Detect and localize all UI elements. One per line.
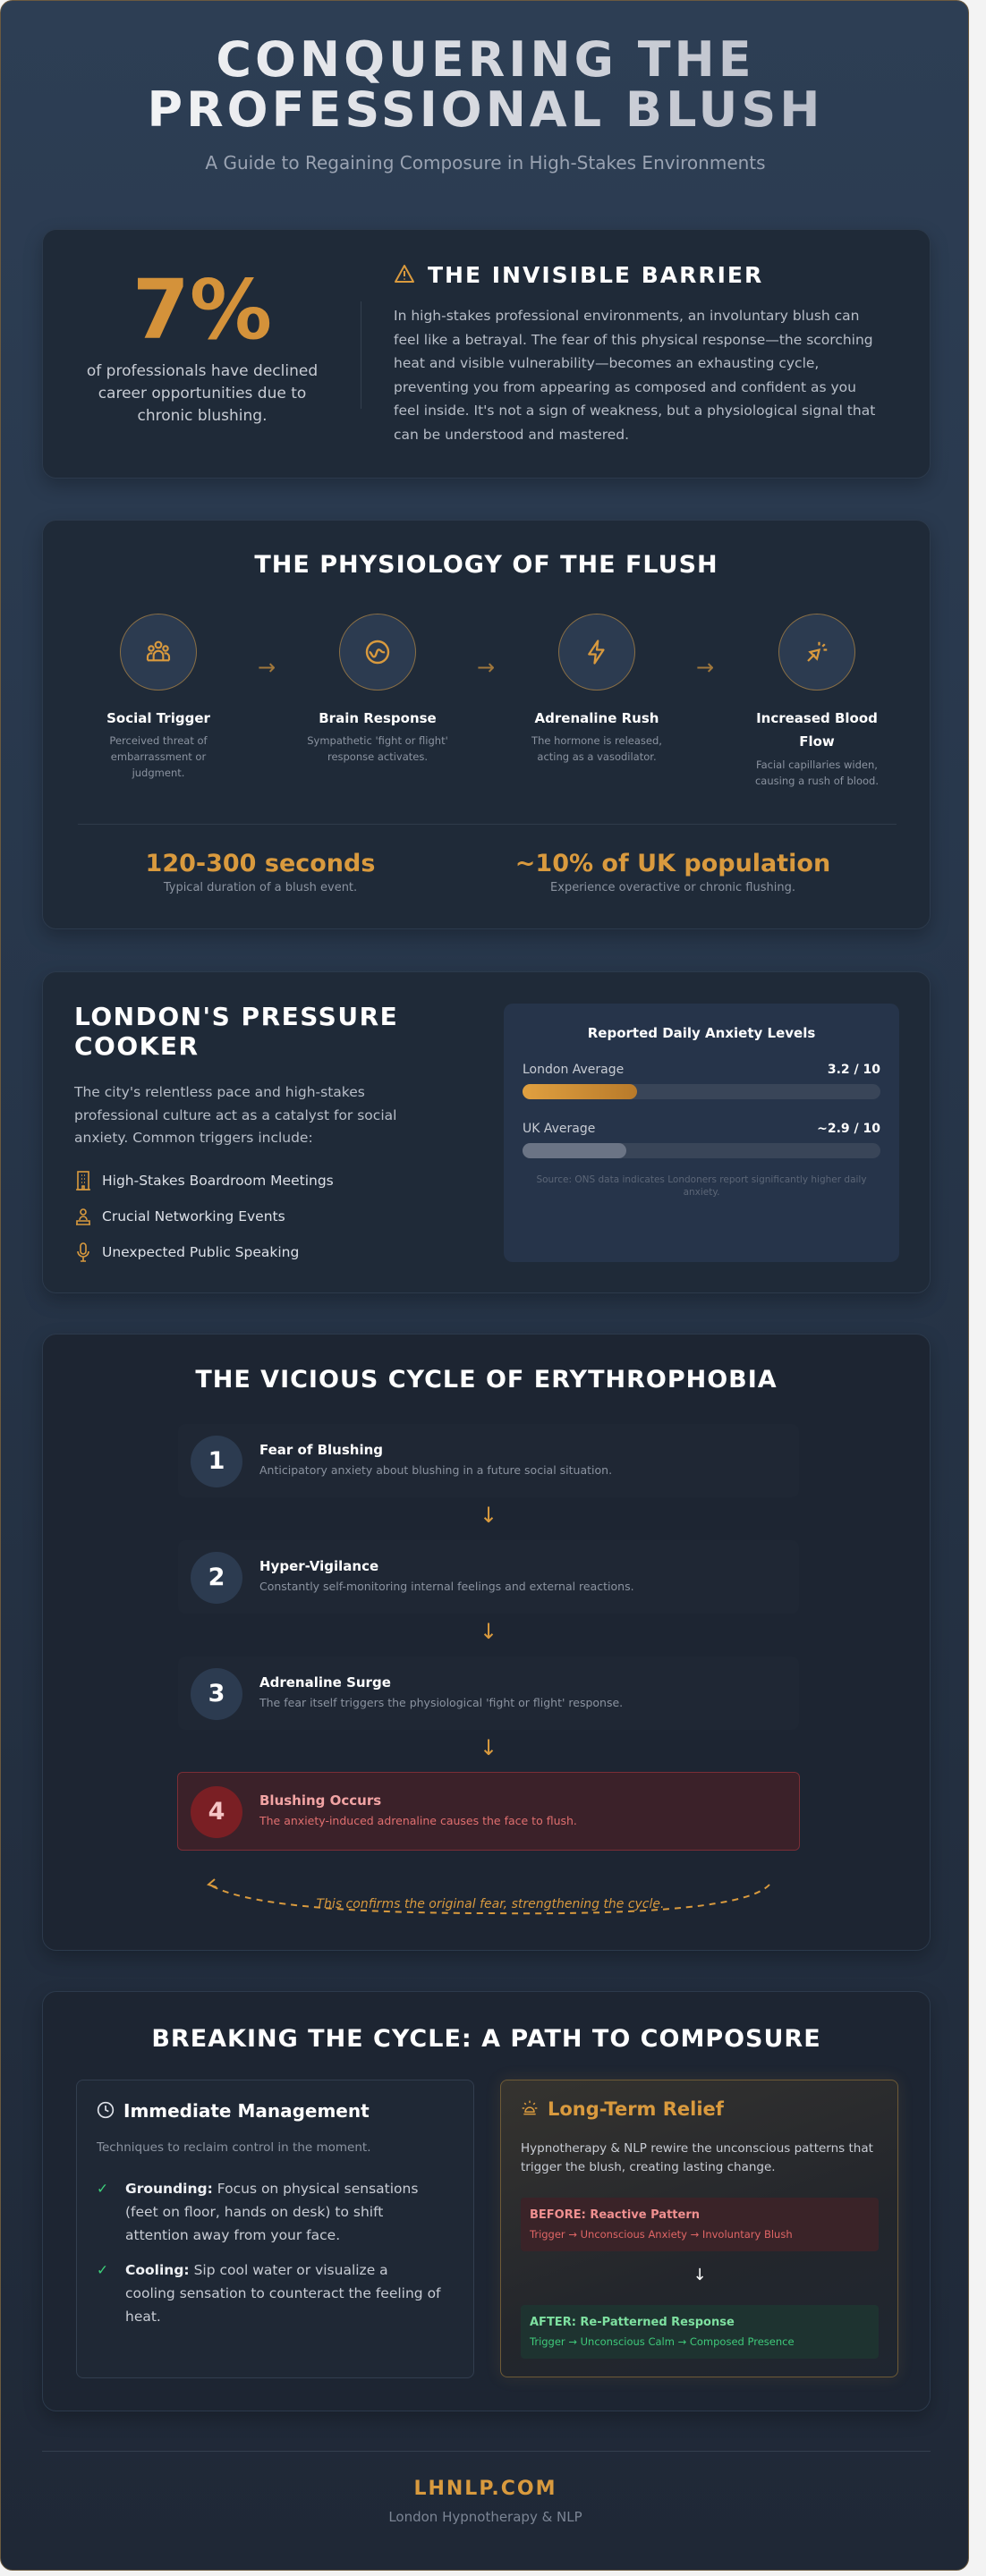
arrow: cycle return — [207, 1878, 770, 1914]
step 4: blushing occurs — [177, 1772, 800, 1851]
before pattern — [521, 2198, 879, 2251]
chart: anxiety levels: Reported Daily Anxiety Levels — [588, 1025, 815, 1041]
arrow: ↓ — [480, 1619, 497, 1644]
step 3: The fear itself triggers the physiological 'fight or flight' response. — [259, 1696, 623, 1709]
arrow: → — [477, 655, 495, 680]
box: long-term relief: Hypnotherapy & NLP rewire the unconscious patterns that trigger the blush, creating lasting change. — [521, 2141, 873, 2174]
step: social trigger — [106, 614, 210, 779]
chart: anxiety levels — [504, 1004, 899, 1262]
after pattern: Trigger → Unconscious Calm → Composed Presence — [530, 2335, 795, 2348]
panel: invisible barrier — [42, 229, 931, 479]
step: brain response: Brain Response — [319, 710, 437, 726]
step: social trigger: Social Trigger — [106, 710, 210, 726]
text: london intro: The city's relentless pace and high-stakes professional culture act as a catalyst for social anxiety. Common triggers include: — [74, 1084, 396, 1146]
box: long-term relief — [500, 2080, 898, 2377]
step 1: Anticipatory anxiety about blushing in a future social situation. — [259, 1463, 612, 1477]
step 2 — [178, 1540, 799, 1614]
arrow: ↓ — [693, 2266, 707, 2284]
heading: LONDON'S PRESSURE COOKER — [74, 1002, 398, 1061]
panel: breaking the cycle — [42, 1991, 931, 2411]
box: immediate management — [76, 2080, 474, 2378]
arrow: cycle return: This confirms the original fear, strengthening the cycle. — [317, 1897, 664, 1911]
step 4: blushing occurs: 4 — [208, 1798, 225, 1826]
title: CONQUERING THE — [216, 31, 755, 88]
box: immediate management: ✓ — [97, 2181, 108, 2197]
list: triggers: High-Stakes Boardroom Meetings — [102, 1173, 334, 1189]
box: immediate management: Immediate Management — [123, 2100, 370, 2122]
step 3: Adrenaline Surge — [259, 1674, 391, 1690]
list: triggers: Crucial Networking Events — [102, 1208, 285, 1224]
step: brain response: Sympathetic 'fight or flight' response activates. — [307, 734, 448, 763]
stat: population: Experience overactive or chronic flushing. — [550, 881, 795, 894]
list: triggers: Unexpected Public Speaking — [102, 1244, 299, 1260]
step: increased blood flow — [755, 614, 879, 787]
step: adrenaline rush: Adrenaline Rush — [535, 710, 659, 726]
step: increased blood flow: Facial capillaries widen, causing a rush of blood. — [755, 758, 879, 787]
icon: warning — [395, 265, 414, 283]
chart: anxiety levels: UK Average — [523, 1122, 595, 1136]
panel: physiology — [42, 520, 931, 929]
heading: BREAKING THE CYCLE: A PATH TO COMPOSURE — [151, 2025, 821, 2053]
box: immediate management: Cooling: Sip cool water or visualize a cooling sensation to counteract the feeling of heat. — [125, 2262, 441, 2325]
before pattern: Trigger → Unconscious Anxiety → Involuntary Blush — [530, 2228, 793, 2241]
stat: duration: 120-300 seconds — [146, 850, 375, 877]
arrow: → — [258, 655, 276, 680]
chart: anxiety levels: ~2.9 / 10 — [817, 1122, 880, 1136]
step 1 — [178, 1424, 799, 1497]
title: PROFESSIONAL BLUSH — [148, 81, 823, 138]
panel: vicious cycle — [42, 1334, 931, 1951]
step 3 — [178, 1657, 799, 1730]
heading: the invisible barrier: THE INVISIBLE BARRIER — [428, 262, 763, 288]
step: social trigger: Perceived threat of embarrassment or judgment. — [109, 734, 208, 779]
arrow: → — [696, 655, 714, 680]
heading: THE VICIOUS CYCLE OF ERYTHROPHOBIA — [195, 1366, 778, 1394]
footer — [388, 2478, 582, 2525]
box: immediate management: ✓ — [97, 2262, 108, 2278]
step: brain response — [307, 614, 448, 763]
text: barrier body: In high-stakes professional environments, an involuntary blush can feel like a betrayal. The fear of this physical response—the scorching heat and visible vulnerability—becomes an exhausting cycle, preventing you from appearing as composed and confident as you feel inside. It's not a sign of weakness, but a physiological signal that can be understood and mastered. — [394, 308, 875, 442]
chart: anxiety levels: 3.2 / 10 — [828, 1063, 880, 1077]
stat: 7%: of professionals have declined career opportunities due to chronic blushing. — [87, 362, 318, 425]
stat: duration: Typical duration of a blush event. — [164, 881, 357, 894]
after pattern — [521, 2305, 879, 2359]
step 3: 3 — [208, 1680, 225, 1707]
panel: london pressure cooker — [42, 971, 931, 1293]
list: triggers — [76, 1171, 334, 1262]
arrow: ↓ — [480, 1735, 497, 1760]
box: immediate management: Techniques to reclaim control in the moment. — [97, 2140, 370, 2155]
step: adrenaline rush — [531, 614, 662, 763]
stat: population — [515, 850, 830, 894]
heading: THE PHYSIOLOGY OF THE FLUSH — [254, 551, 718, 579]
step: adrenaline rush: The hormone is released, acting as a vasodilator. — [531, 734, 662, 763]
stat: population: ~10% of UK population — [515, 850, 830, 877]
stat: duration — [146, 850, 375, 894]
chart: anxiety levels: London Average — [523, 1063, 624, 1077]
arrow: ↓ — [480, 1503, 497, 1528]
box: immediate management: Grounding: Focus on physical sensations (feet on floor, hands on desk) to shift attention away from your face. — [125, 2181, 418, 2243]
step 2: 2 — [208, 1563, 225, 1591]
footer: LHNLP.COM — [413, 2478, 557, 2500]
step 1: 1 — [208, 1447, 225, 1475]
footer: London Hypnotherapy & NLP — [388, 2509, 582, 2525]
after pattern: AFTER: Re-Patterned Response — [530, 2316, 735, 2329]
step 4: blushing occurs: Blushing Occurs — [259, 1792, 381, 1809]
step 1: Fear of Blushing — [259, 1442, 383, 1458]
title — [1, 35, 970, 135]
step 2: Hyper-Vigilance — [259, 1558, 378, 1574]
before pattern: BEFORE: Reactive Pattern — [530, 2208, 700, 2222]
stat: 7%: 7% — [132, 262, 272, 358]
step 4: blushing occurs: The anxiety-induced adrenaline causes the face to flush. — [259, 1814, 577, 1827]
step 2: Constantly self-monitoring internal feelings and external reactions. — [259, 1580, 634, 1593]
stat: 7% — [87, 262, 318, 425]
subtitle: A Guide to Regaining Composure in High-Stakes Environments — [205, 152, 766, 174]
box: long-term relief: Long-Term Relief — [548, 2098, 724, 2120]
chart: anxiety levels: Source: ONS data indicates Londoners report significantly higher daily anxiety. — [536, 1174, 867, 1198]
step: increased blood flow: Increased Blood Flow — [756, 710, 878, 750]
